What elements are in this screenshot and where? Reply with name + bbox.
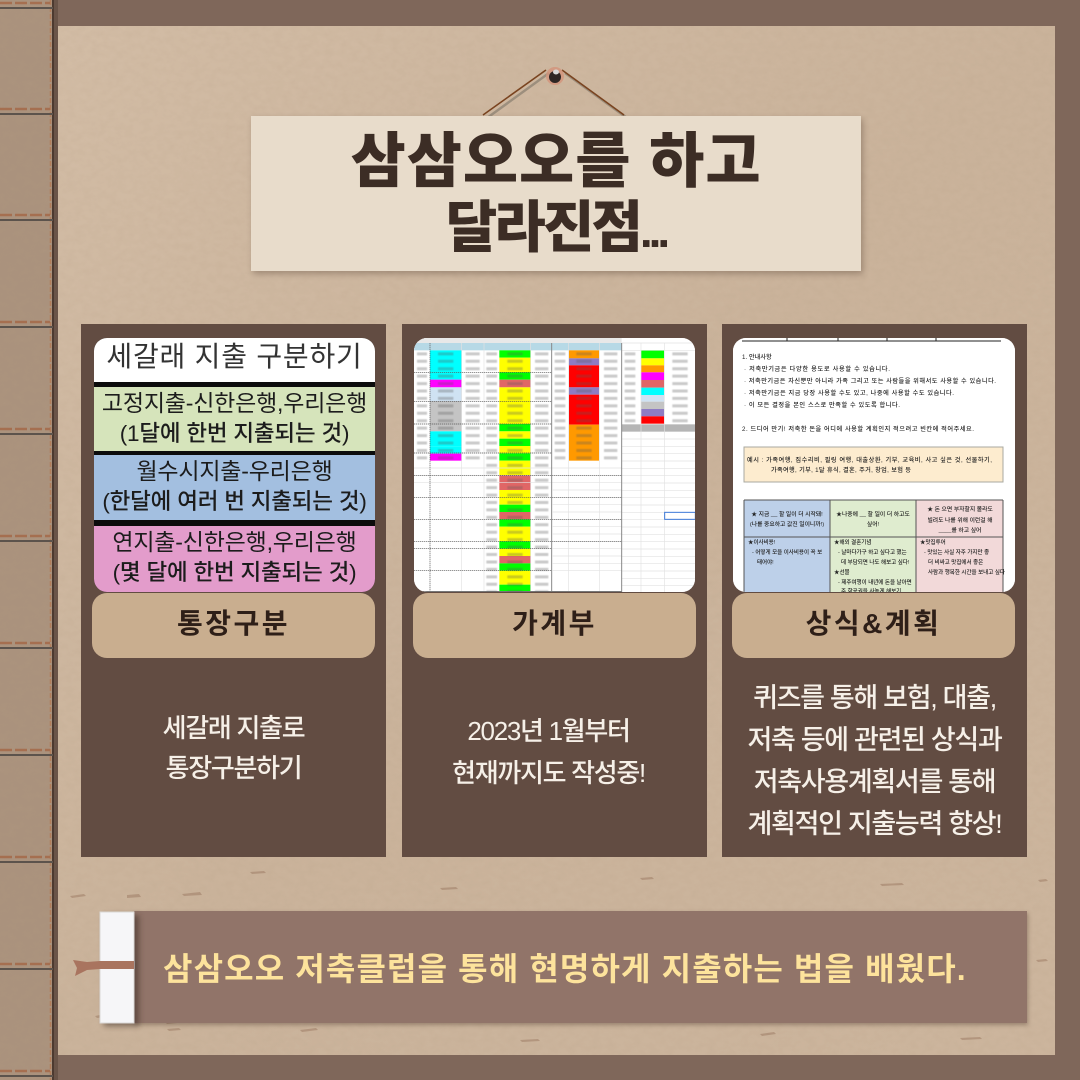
description: 통장구분하기: [166, 753, 301, 783]
image: 저축사용계획서 문서: ★ 돈 으면 부자할지 몰라도: [927, 505, 993, 513]
image: 저축사용계획서 문서: · 저축만기금은 지금 당장 사용할 수도 있고, 나중에 사용할 수도 있습니다.: [744, 389, 954, 397]
description: 저축 등에 관련된 상식과: [747, 725, 1002, 755]
label: 가계부: [413, 593, 696, 658]
image: 저축사용계획서 문서: - 맛있는 사실 자주 가지만 좋: [924, 548, 989, 556]
panel: 가계부: [402, 324, 707, 857]
image: 저축사용계획서 문서: [733, 338, 1015, 592]
image: 지출 구분표: (1달에 한번 지출되는 것): [120, 421, 349, 446]
description: [452, 716, 645, 788]
icon: paper tag with string: [73, 912, 142, 1030]
label: 상식&계획: 상식&계획: [806, 608, 941, 639]
image: 저축사용계획서 문서: 싶어!: [867, 520, 880, 528]
image: 저축사용계획서 문서: ★나중에 __ 할 일이 더 하고도: [836, 510, 910, 518]
image: 지출 구분표: 고정지출-신한은행,우리은행: [102, 390, 367, 416]
image: 저축사용계획서 문서: ★ 지금 __ 할 일이 더 시작돼!: [751, 510, 823, 518]
image: 저축사용계획서 문서: · 저축만기금은 자신뿐만 아니라 가족 그리고 또는 사람들을 위해서도 사용할 수 있습니다.: [744, 377, 996, 385]
description: [163, 713, 304, 783]
image: 저축사용계획서 문서: 1. 안내사항: [742, 353, 772, 361]
label: 상식&계획: [732, 593, 1015, 658]
image: 저축사용계획서 문서: ★선물: [834, 568, 850, 576]
image: 저축사용계획서 문서: ★해외 결혼기념: [834, 538, 871, 546]
image: 저축사용계획서 문서: - 제주여행이 내년에 돈을 날아면: [838, 578, 912, 586]
panel: 상식&계획: [722, 324, 1027, 857]
label: 가계부: 가계부: [512, 608, 597, 639]
description: 세갈래 지출로: [163, 713, 304, 743]
image: 가계부 스프레드시트: [414, 338, 695, 592]
image: 지출 구분표: [94, 338, 375, 592]
book spine stitching: [0, 0, 54, 1080]
image: 저축사용계획서 문서: 태어야!: [757, 558, 774, 566]
image: 저축사용계획서 문서: 더 비싸고 맛집에서 좋은: [928, 558, 983, 566]
image: 저축사용계획서 문서: · 저축만기금은 다양한 용도로 사용할 수 있습니다.: [744, 365, 890, 373]
description: 퀴즈를 통해 보험, 대출,: [753, 683, 996, 713]
banner text: 삼삼오오 저축클럽을 통해 현명하게 지출하는 법을 배웠다.: [163, 951, 967, 987]
title card: [251, 116, 861, 271]
description: 계획적인 지출능력 향상!: [747, 809, 1002, 839]
title card: 달라진점...: [446, 196, 666, 259]
image: 저축사용계획서 문서: 빌려도 나를 위해 이런걸 해: [927, 516, 993, 524]
image: 지출 구분표: 세갈래 지출 구분하기: [106, 341, 363, 372]
image: 저축사용계획서 문서: 데 부담되면 나도 해보고 싶다!: [841, 558, 910, 566]
banner: 결론: [134, 911, 1027, 1023]
image: 저축사용계획서 문서: ★맛집투어: [920, 538, 946, 546]
image: 저축사용계획서 문서: 사람과 행복한 시간을 보내고 싶다: [928, 568, 1005, 576]
label: 통장구분: 통장구분: [177, 608, 290, 639]
image: 지출 구분표: 연지출-신한은행,우리은행: [112, 529, 357, 555]
image: 저축사용계획서 문서: ★이사비용!: [748, 538, 776, 546]
image: 저축사용계획서 문서: 2. 드디어 만기! 저축한 돈을 어디에 사용할 계획인지 적으려고 빈칸에 적어주세요.: [742, 425, 974, 433]
image: 저축사용계획서 문서: ____를 하고 싶어: [938, 526, 981, 534]
image: 저축사용계획서 문서: 예시 : 가족여행, 집수리비, 필링 여행, 대출상환, 기부, 교육비, 사고 싶은 것, 선물하기,: [747, 456, 992, 464]
image: 지출 구분표: (한달에 여러 번 지출되는 것): [102, 489, 367, 514]
description: 저축사용계획서를 통해: [754, 767, 995, 797]
label: 통장구분: [92, 593, 375, 658]
image: 지출 구분표: 월수시지출-우리은행: [136, 458, 333, 484]
title card: 삼삼오오를 하고: [350, 128, 762, 195]
image: 지출 구분표: (몇 달에 한번 지출되는 것): [113, 560, 356, 585]
image: 저축사용계획서 문서: - 날마다가구 하고 싶다고 했는: [838, 548, 907, 556]
image: 저축사용계획서 문서: 가족여행, 기부, 1달 휴식, 결혼, 주거, 창업, 보험 등: [771, 466, 911, 474]
panel: 통장구분: [81, 324, 386, 857]
description: 2023년 1월부터: [467, 716, 630, 746]
description: [747, 683, 1002, 839]
image: 저축사용계획서 문서: · 이 모든 결정을 본인 스스로 만족할 수 있도록 합니다.: [744, 401, 900, 409]
image: 저축사용계획서 문서: (나를 중요하고 값진 일이니까!): [750, 520, 824, 528]
description: 현재까지도 작성중!: [452, 758, 645, 788]
hanging string and nail: [482, 67, 626, 116]
image: 저축사용계획서 문서: - 어떻게 모을 이사비용이 꼭 보: [752, 548, 822, 556]
